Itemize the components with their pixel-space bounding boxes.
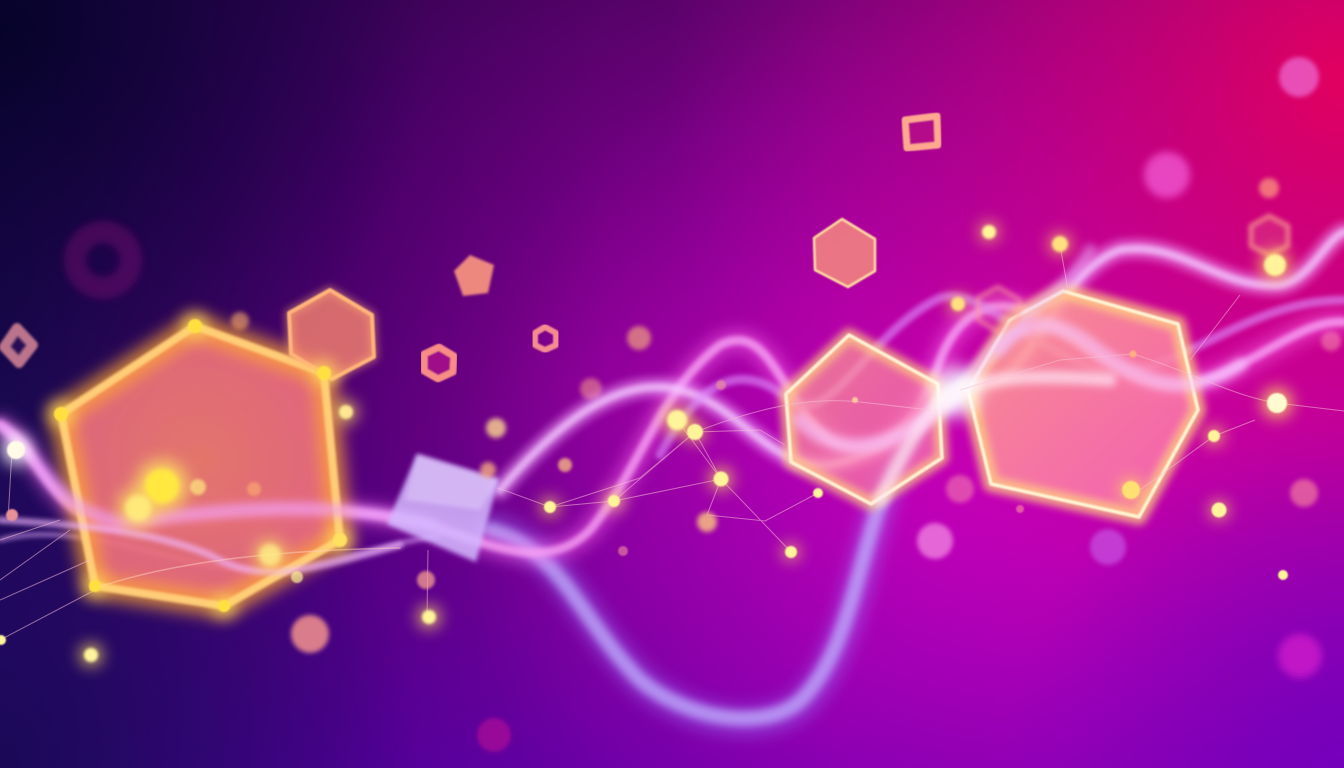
wave: blue ribbon sweeping across the bottom [490,385,965,721]
dark ring, top left [75,232,131,288]
tiny ring hexagon [535,327,556,350]
network lines [0,245,1344,640]
solid pentagon [454,255,494,296]
wave: ribbon crossing the left hexagon [0,425,430,590]
glowing particles [0,225,1288,662]
wave: light ribbons over the right hexagons [800,250,1240,500]
ring at left edge [4,328,33,363]
wave: pink ribbons through the middle [0,232,1344,571]
faint hexagon behind wave [978,287,1020,332]
translucent cube [387,454,499,562]
hexagon: floating outlined top [814,219,875,287]
particle glow halos [1,223,1292,666]
square outline, top [905,116,938,148]
hexagon: large outlined right [968,291,1198,517]
hexagon: small top of left cluster [289,290,374,379]
faint ring top right [1251,216,1288,255]
small ring hexagon [424,347,454,379]
hexagon: large left glowing [61,326,340,606]
hexagon: outlined middle right [786,335,942,504]
small floating shapes [4,116,1288,379]
